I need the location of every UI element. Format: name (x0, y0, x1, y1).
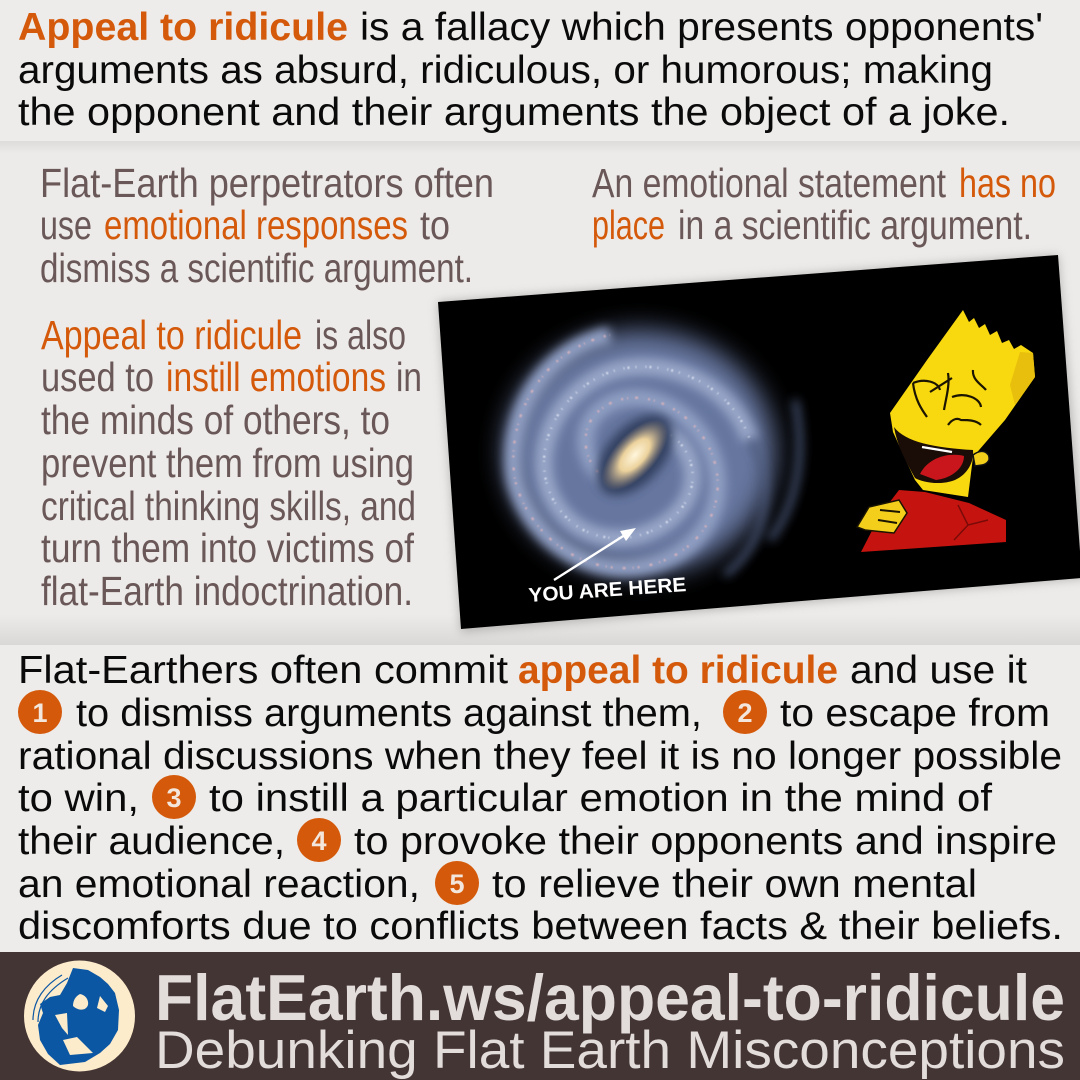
marker 4: 4 (311, 826, 327, 856)
text block: reasons with numbered markers: discomforts due to conflicts between facts & their beliefs. (18, 905, 1063, 948)
image: tilted galaxy and laughing cartoon (438, 255, 1080, 632)
marker 2: 2 (737, 698, 753, 728)
cartoon: laughing boy (857, 310, 1035, 552)
text block: instilling emotions: prevent them from using (41, 440, 414, 486)
text block: instilling emotions: the minds of others, to (41, 397, 390, 443)
text block: reasons with numbered markers: to win, (18, 777, 139, 820)
text block: no place in science (592, 160, 1056, 248)
text block: reasons with numbered markers: their audience, (18, 820, 285, 863)
marker 3 (152, 775, 196, 819)
panel: lower band (0, 645, 1080, 952)
text block: emotional responses: dismiss a scientific argument. (40, 245, 473, 291)
text block: emotional responses: to (420, 202, 450, 248)
heading: definition: is a fallacy which presents opponents' (360, 6, 1043, 49)
heading: definition (18, 6, 1043, 134)
marker 4 (297, 818, 341, 862)
text block: reasons with numbered markers: to relieve their own mental (492, 863, 977, 906)
text block: reasons with numbered markers: to provoke their opponents and inspire (354, 820, 1057, 863)
icon: flat earth globe (24, 960, 135, 1072)
text block: instilling emotions: turn them into victims of (41, 525, 415, 571)
text block: emotional responses: use (40, 202, 92, 248)
text block: instilling emotions: Appeal to ridicule (41, 312, 302, 358)
arrow: you are here (554, 528, 636, 580)
footer: tagline: Debunking Flat Earth Misconceptions (155, 1021, 1065, 1080)
text block: reasons with numbered markers: an emotional reaction, (18, 863, 420, 906)
text block: instilling emotions (41, 312, 422, 614)
text block: reasons with numbered markers (18, 649, 1063, 948)
text block: no place in science: An emotional statement (592, 160, 946, 206)
text block: reasons with numbered markers: to instill a particular emotion in the mind of (209, 777, 992, 820)
text block: instilling emotions: in (396, 354, 422, 400)
text block: reasons with numbered markers: to dismiss arguments against them, (76, 692, 702, 735)
heading: definition: Appeal to ridicule (18, 6, 348, 49)
footer bar (0, 952, 1080, 1080)
text block: reasons with numbered markers: appeal to ridicule (518, 649, 838, 692)
galaxy (505, 330, 800, 575)
text block: reasons with numbered markers: to escape from (780, 692, 1050, 735)
text block: reasons with numbered markers: and use it (850, 649, 1027, 692)
text block: instilling emotions: instill emotions (166, 354, 386, 400)
text block: instilling emotions: used to (41, 354, 154, 400)
text block: instilling emotions: critical thinking skills, and (41, 483, 416, 529)
marker 2 (723, 690, 767, 734)
text block: reasons with numbered markers: Flat-Earthers often commit (18, 649, 508, 692)
marker 5: 5 (449, 869, 465, 899)
text block: emotional responses: Flat-Earth perpetrators often (40, 160, 494, 206)
text block: no place in science: place (592, 202, 665, 248)
marker 1: 1 (32, 698, 48, 728)
marker 5 (435, 861, 479, 905)
heading: definition: arguments as absurd, ridiculous, or humorous; making (18, 49, 993, 92)
label: you are here: YOU ARE HERE (528, 574, 687, 607)
marker 3: 3 (166, 783, 182, 813)
text block: instilling emotions: flat-Earth indoctrination. (41, 568, 413, 614)
text block: emotional responses (40, 160, 494, 291)
text block: reasons with numbered markers: rational discussions when they feel it is no longer possible (18, 735, 1062, 778)
footer: site url: FlatEarth.ws/appeal-to-ridicule (155, 961, 1065, 1034)
heading: definition: the opponent and their arguments the object of a joke. (18, 91, 1010, 134)
text block: emotional responses: emotional responses (104, 202, 408, 248)
panel: middle band (0, 141, 1080, 645)
text block: no place in science: has no (959, 160, 1056, 206)
marker 1 (18, 690, 62, 734)
text block: instilling emotions: is also (315, 312, 406, 358)
